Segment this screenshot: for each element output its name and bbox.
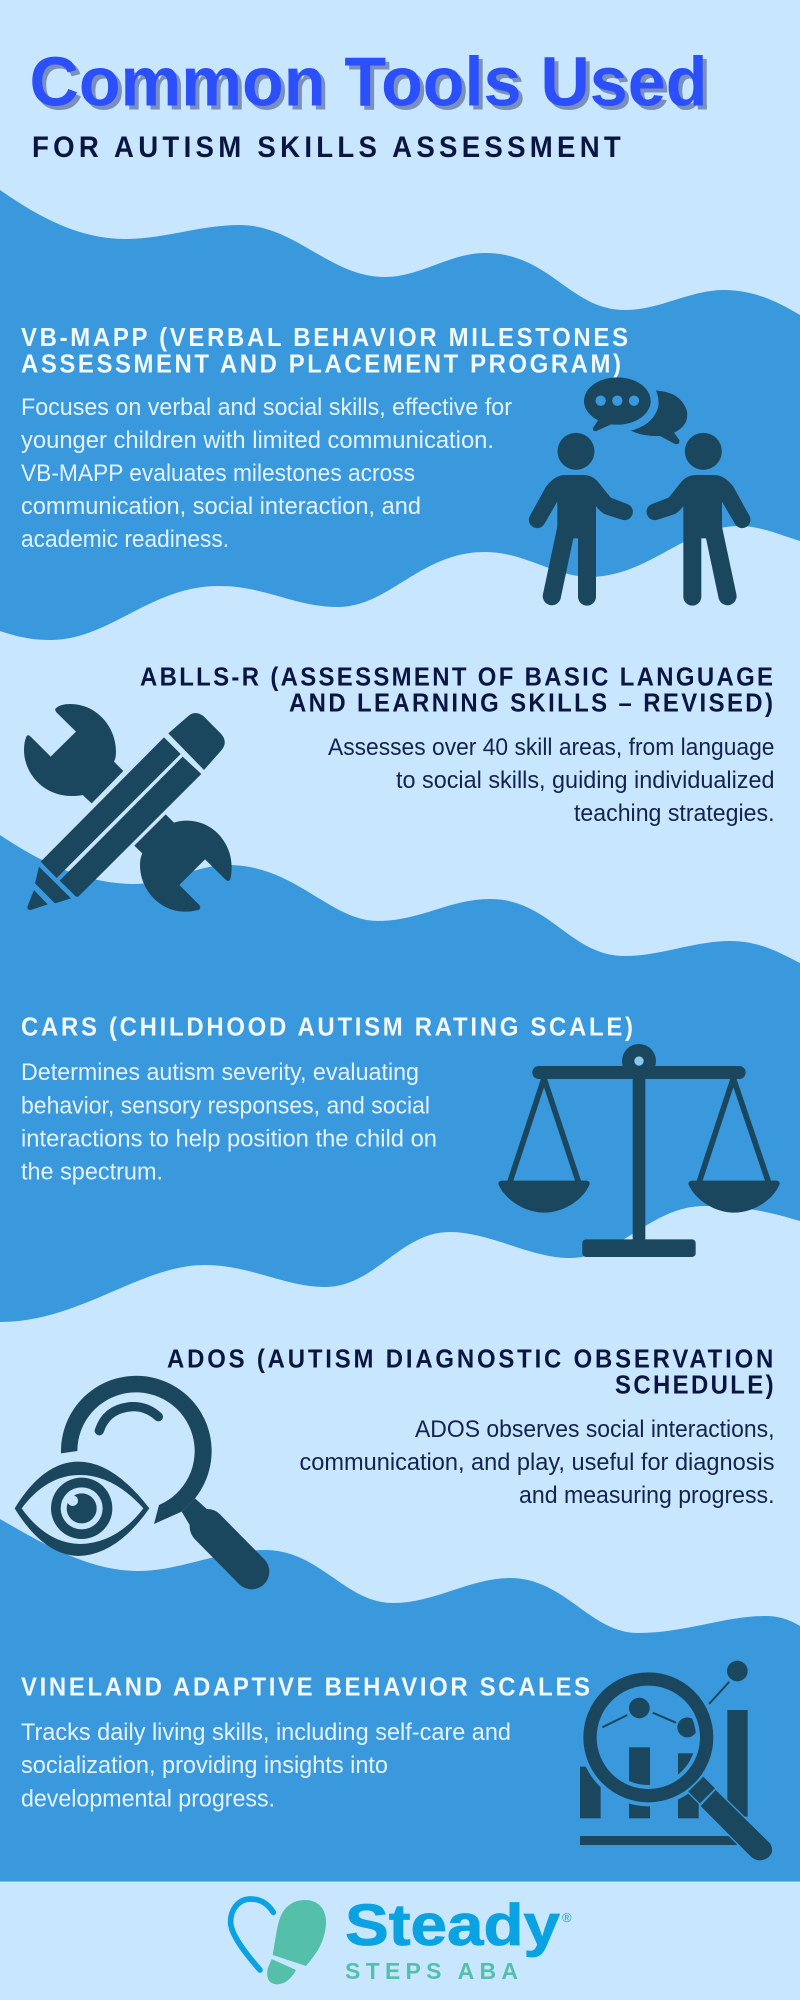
body text: Vineland: Tracks daily living skills, including self-care and <box>21 1719 511 1746</box>
panel: ABLLS-R <box>24 663 774 912</box>
body text: Vineland: socialization, providing insights into <box>21 1752 388 1779</box>
title block <box>30 42 712 164</box>
panel: ADOS <box>15 1345 774 1572</box>
heading: Vineland: VINELAND ADAPTIVE BEHAVIOR SCALES <box>21 1673 590 1702</box>
icon: wrench and pencil <box>24 704 232 912</box>
body text: ADOS: communication, and play, useful for diagnosis <box>300 1449 774 1476</box>
panel: VB-MAPP <box>21 323 750 606</box>
heading: ADOS: SCHEDULE) <box>615 1371 774 1400</box>
heading: VB-MAPP: VB-MAPP (VERBAL BEHAVIOR MILESTONES <box>21 323 628 352</box>
body text: Vineland <box>21 1719 511 1812</box>
heading: VB-MAPP: ASSESSMENT AND PLACEMENT PROGRAM) <box>21 350 621 379</box>
body text: CARS: behavior, sensory responses, and social <box>21 1092 430 1120</box>
wave band: Vineland background <box>0 1519 800 1882</box>
heading: CARS: CARS (CHILDHOOD AUTISM RATING SCALE) <box>21 1013 633 1042</box>
panel: Vineland <box>21 1661 772 1860</box>
body text: Vineland: developmental progress. <box>21 1786 275 1812</box>
body text: VB-MAPP: communication, social interaction, and <box>21 493 421 520</box>
heading: ABLLS-R: ABLLS-R (ASSESSMENT OF BASIC LANGUAGE <box>140 663 773 692</box>
heading: ADOS <box>167 1345 774 1400</box>
heading: ADOS: ADOS (AUTISM DIAGNOSTIC OBSERVATION <box>167 1345 773 1374</box>
body text: CARS <box>21 1059 437 1186</box>
panel: CARS <box>21 1013 780 1257</box>
body text: VB-MAPP: Focuses on verbal and social skills, effective for <box>21 394 512 421</box>
heading: ABLLS-R <box>140 663 773 718</box>
body text: CARS: the spectrum. <box>21 1158 163 1186</box>
body text: ABLLS-R: teaching strategies. <box>574 800 774 827</box>
wave band: VB-MAPP background <box>0 190 800 640</box>
logo mark: heart and footprint <box>231 1899 326 1984</box>
body text: ABLLS-R: Assesses over 40 skill areas, from language <box>328 734 774 761</box>
icon: two people talking <box>529 377 750 606</box>
body text: CARS: Determines autism severity, evaluating <box>21 1059 419 1086</box>
body text: ABLLS-R: to social skills, guiding individualized <box>396 767 774 794</box>
logo wordmark: Steady <box>345 1893 560 1958</box>
logo tagline: STEPS ABA <box>345 1958 518 1984</box>
body text: CARS: interactions to help position the child on <box>21 1126 437 1152</box>
registered mark: ® <box>562 1910 572 1925</box>
subtitle: FOR AUTISM SKILLS ASSESSMENT <box>32 131 621 164</box>
body text: VB-MAPP <box>21 394 512 553</box>
logo: Steady Steps ABA <box>231 1893 572 1984</box>
body text: ADOS <box>300 1416 774 1509</box>
body text: ADOS: ADOS observes social interactions, <box>415 1416 774 1443</box>
wave band: CARS background <box>0 835 800 1322</box>
body text: VB-MAPP: academic readiness. <box>21 526 229 553</box>
icon: magnifying glass with eye <box>15 1376 252 1572</box>
body text: ADOS: and measuring progress. <box>519 1482 774 1509</box>
icon: chart under magnifying glass <box>580 1661 772 1860</box>
body text: VB-MAPP: younger children with limited communication. <box>21 427 494 454</box>
body text: ABLLS-R <box>328 734 774 827</box>
body text: VB-MAPP: VB-MAPP evaluates milestones across <box>21 460 415 487</box>
icon: balance scale <box>498 1044 780 1257</box>
heading: ABLLS-R: AND LEARNING SKILLS – REVISED) <box>289 689 773 718</box>
title shadow and main title: Common Tools Used <box>30 42 708 120</box>
heading: VB-MAPP <box>21 323 628 379</box>
title shadow and main title: Common Tools Used <box>34 46 712 124</box>
